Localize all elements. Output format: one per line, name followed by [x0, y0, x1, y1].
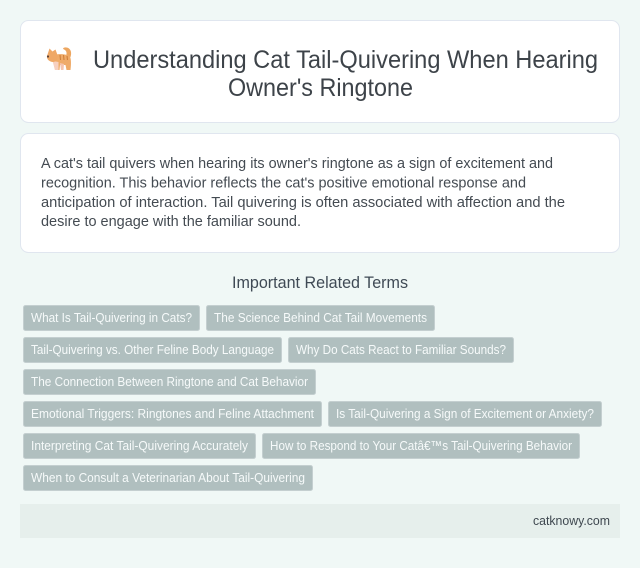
tag: [24, 370, 316, 394]
tag: [262, 434, 580, 458]
tag: What Is Tail-Quivering in Cats?: [31, 310, 192, 325]
title text: [93, 46, 598, 102]
tag: Tail-Quivering vs. Other Feline Body Language: [31, 342, 274, 357]
tag: [328, 402, 602, 426]
heading: related terms: Important Related Terms: [232, 273, 408, 292]
summary text: desire to engage with the familiar sound.: [41, 213, 301, 230]
tag: [206, 306, 434, 330]
tag: [288, 338, 514, 362]
summary text: [41, 155, 565, 230]
tag: How to Respond to Your Catâ€™s Tail-Quivering Behavior: [270, 438, 573, 453]
footer: [20, 504, 620, 538]
tag: The Connection Between Ringtone and Cat Behavior: [31, 374, 309, 389]
tag: [24, 338, 282, 362]
tag: [24, 402, 322, 426]
title panel: [20, 20, 620, 122]
icon: cat: [47, 47, 71, 70]
tag: [24, 306, 200, 330]
tag: Interpreting Cat Tail-Quivering Accurately: [31, 438, 249, 453]
summary text: anticipation of interaction. Tail quivering is often associated with affection and the: [41, 194, 565, 211]
tag: When to Consult a Veterinarian About Tail-Quivering: [31, 470, 305, 485]
summary text: A cat's tail quivers when hearing its owner's ringtone as a sign of excitement and: [41, 155, 553, 172]
tag: [24, 466, 312, 490]
footer text: catknowy.com: [533, 513, 610, 528]
title text: Owner's Ringtone: [228, 74, 413, 102]
summary panel: [20, 134, 620, 252]
summary text: recognition. This behavior reflects the cat's positive emotional response and: [41, 174, 526, 192]
tag: Is Tail-Quivering a Sign of Excitement or Anxiety?: [336, 406, 594, 421]
tag: Emotional Triggers: Ringtones and Feline Attachment: [31, 406, 314, 421]
tag list: [24, 306, 602, 490]
tag: The Science Behind Cat Tail Movements: [214, 310, 427, 325]
tag: [24, 434, 256, 458]
title text: Understanding Cat Tail-Quivering When Hearing: [93, 46, 598, 74]
tag: Why Do Cats React to Familiar Sounds?: [296, 342, 506, 357]
